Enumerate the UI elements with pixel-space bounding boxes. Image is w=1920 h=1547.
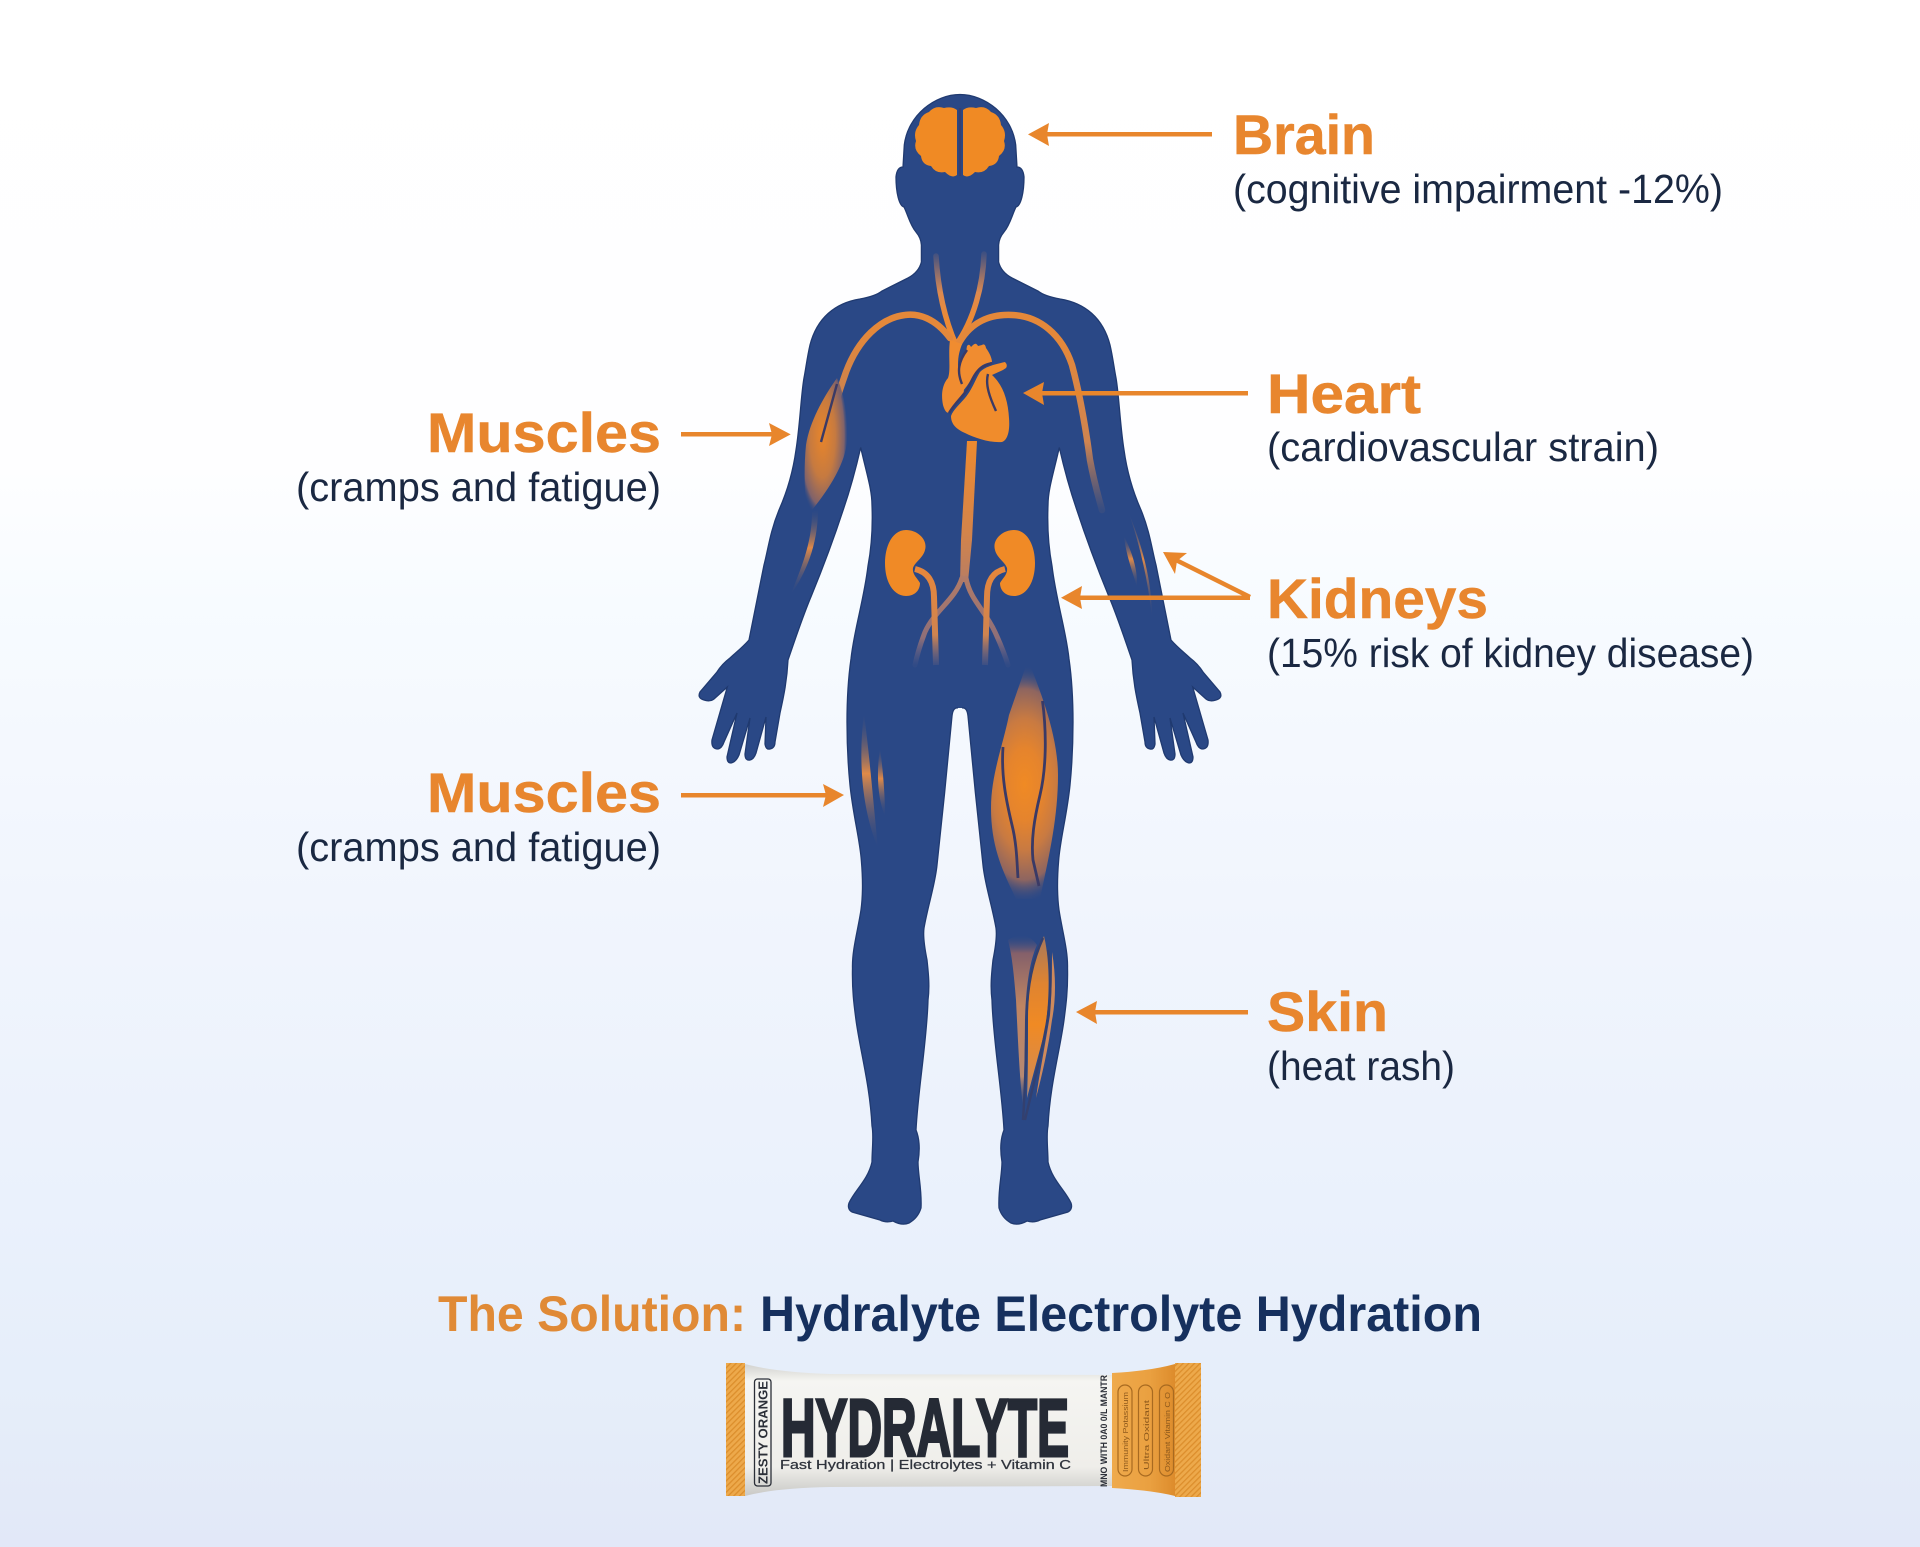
human body figure <box>699 94 1221 1224</box>
packet right crimp <box>1175 1363 1201 1497</box>
label: brain <box>1233 103 1723 212</box>
solution heading: Hydralyte Electrolyte Hydration <box>760 1286 1482 1342</box>
kidneys <box>885 530 1035 665</box>
label: lower muscles: (cramps and fatigue) <box>296 824 661 870</box>
feature pills: Immunity Potassium <box>1121 1392 1130 1472</box>
packet left crimp <box>726 1363 745 1496</box>
tagline: Fast Hydration | Electrolytes + Vitamin C <box>780 1457 1071 1472</box>
label: brain: (cognitive impairment -12%) <box>1233 166 1723 212</box>
label: upper muscles <box>296 401 661 510</box>
packet orange end <box>1112 1364 1175 1496</box>
product packet <box>726 1363 1201 1497</box>
label: skin: Skin <box>1267 980 1388 1043</box>
arrow: lower muscles <box>681 784 844 807</box>
body silhouette <box>699 94 1221 1224</box>
side print: MNO WITH 0A0 0/L MANTR <box>1099 1375 1110 1487</box>
arm muscles <box>791 378 1152 618</box>
packet white body <box>745 1364 1112 1496</box>
label: kidneys <box>1267 567 1754 676</box>
label: heart: Heart <box>1267 362 1421 425</box>
brain <box>915 107 1005 176</box>
arrow: skin <box>1076 1001 1248 1024</box>
label: lower muscles: Muscles <box>427 761 661 824</box>
label: upper muscles: Muscles <box>427 401 661 464</box>
blood vessels <box>824 254 1102 665</box>
feature pills: Ultra Oxidant <box>1142 1399 1151 1470</box>
label: lower muscles <box>296 761 661 870</box>
feature pills: Oxidant Vitamin C O <box>1163 1392 1172 1472</box>
label: upper muscles: (cramps and fatigue) <box>296 464 661 510</box>
feature pills <box>1118 1385 1174 1476</box>
label: heart: (cardiovascular strain) <box>1267 424 1659 470</box>
solution heading: The Solution: <box>438 1286 746 1342</box>
label: heart <box>1267 362 1659 470</box>
brand name: HYDRALYTE <box>781 1383 1069 1474</box>
solution heading <box>438 1286 1482 1342</box>
label: kidneys: Kidneys <box>1267 567 1488 630</box>
arrow: brain <box>1028 123 1212 146</box>
arrow: heart <box>1023 382 1248 405</box>
label: skin: (heat rash) <box>1267 1043 1455 1089</box>
flavour tag: ZESTY ORANGE <box>756 1381 770 1484</box>
label: brain: Brain <box>1233 103 1375 166</box>
label: kidneys: (15% risk of kidney disease) <box>1267 630 1754 676</box>
heart <box>942 340 1009 442</box>
label: skin <box>1267 980 1455 1089</box>
arrows: kidneys <box>1061 552 1250 609</box>
leg muscles <box>861 660 1058 1120</box>
arrow: upper muscles <box>681 423 791 446</box>
